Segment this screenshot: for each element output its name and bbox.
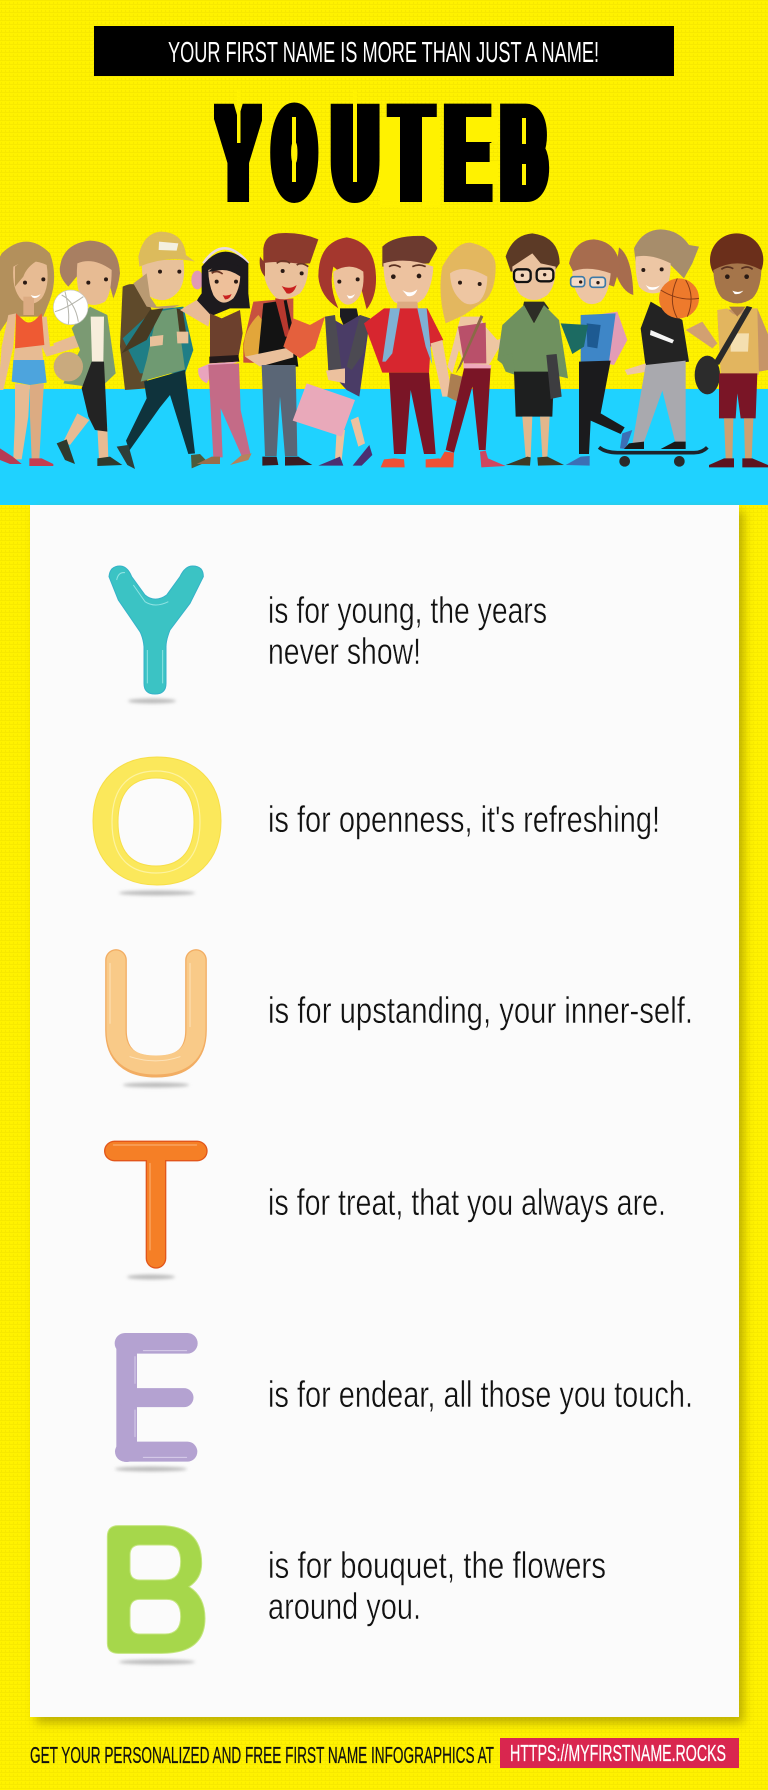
title: YOUTEB: Y (221, 96, 255, 210)
title: YOUTEB: E (448, 96, 487, 210)
title: YOUTEB: B (504, 96, 544, 210)
person: girl with ponytail and tablet (561, 239, 633, 466)
title: YOUTEB: U (335, 96, 375, 210)
text: Y line: is for young, the years (268, 590, 547, 631)
figures left half (0, 232, 376, 469)
faces right half (389, 265, 753, 296)
person: girl with pink case (293, 237, 376, 466)
person: blonde girl (426, 243, 506, 467)
icon: letter B (107, 1526, 205, 1664)
person: boy in yellow jersey (695, 233, 768, 467)
person: boy on skateboard (599, 229, 717, 467)
title: YOUTEB: T (394, 96, 429, 210)
faces left half (23, 261, 360, 299)
text: B line (268, 1545, 606, 1627)
icon: pink handbag (293, 383, 355, 437)
row: T (113, 1145, 666, 1280)
person: boy in red shirt (364, 236, 452, 467)
person: girl with volleyball (53, 241, 122, 466)
illustration: group of young people (0, 229, 768, 469)
title: YOUTEB (214, 90, 550, 210)
person: girl with orange top (0, 242, 80, 466)
icon: glasses (514, 269, 553, 282)
icon: letter Y (109, 566, 203, 704)
title: YOUTEB: O (275, 96, 314, 210)
icon: tablet (561, 323, 588, 354)
figures right half (364, 229, 768, 467)
row: B (107, 1526, 606, 1664)
header banner (94, 26, 674, 76)
text: Y line: never show! (268, 631, 421, 672)
text: B line: is for bouquet, the flowers (268, 1545, 606, 1586)
icon: open book (283, 317, 325, 358)
row: Y (109, 566, 547, 704)
icon: letter T (113, 1145, 197, 1280)
panel: letters (30, 505, 739, 1717)
text: O line: is for openness, it's refreshing! (268, 799, 660, 840)
icon: letter E (115, 1343, 187, 1472)
row: O (93, 757, 660, 896)
blue floor band (0, 389, 768, 505)
text: Y line (268, 590, 547, 672)
icon: basketball (659, 278, 699, 318)
icon: blue glasses (571, 277, 605, 287)
icon: skateboard (599, 447, 707, 467)
person: boy with book (243, 233, 325, 466)
row: E (115, 1343, 693, 1472)
panel shadow (36, 511, 744, 1723)
person: boy with glasses (497, 233, 568, 466)
icon: letter O (93, 757, 221, 896)
person: boy with backpack and cap (117, 232, 207, 469)
icon: letter U (110, 960, 196, 1088)
row: U (110, 960, 693, 1088)
text: T line: is for treat, that you always are. (268, 1182, 666, 1223)
person: girl with headphones (180, 248, 252, 465)
text: B line: around you. (268, 1586, 421, 1627)
icon: volleyball (53, 290, 88, 325)
